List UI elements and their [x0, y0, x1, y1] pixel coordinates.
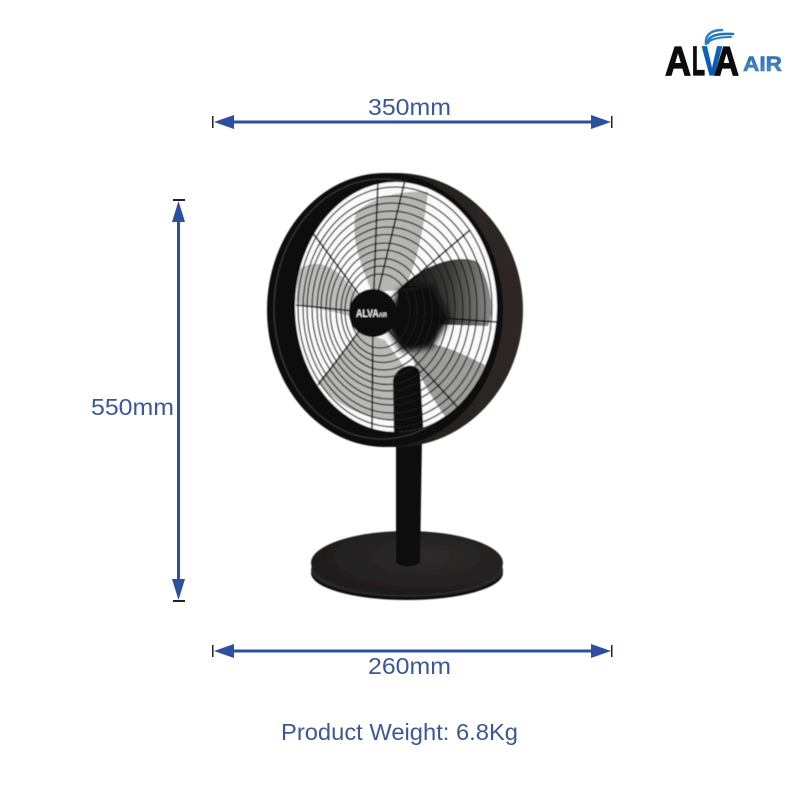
neck: [393, 366, 424, 440]
grille rings: [298, 187, 492, 427]
arrow: left height: [172, 199, 185, 602]
blades: [296, 180, 497, 440]
logo wordmark: [665, 38, 782, 84]
logo wordmark: V: [702, 38, 722, 84]
logo wordmark: A: [665, 38, 691, 84]
blade: left: [296, 264, 358, 316]
arrow: top width: [212, 115, 612, 129]
blade: right dark: [398, 259, 491, 326]
icon: logo swoosh: [706, 30, 733, 44]
fan pole: [396, 438, 422, 566]
arrow: bottom width: [212, 644, 612, 658]
ring highlight: [274, 179, 490, 439]
dimension: height 550mm: [91, 199, 185, 602]
logo wordmark: AIR: [743, 53, 782, 76]
blade: lower right: [408, 343, 485, 418]
fan product image: [267, 173, 523, 600]
motor shadow: [385, 284, 450, 352]
logo: Alva Air: [665, 30, 782, 84]
blade: top: [354, 192, 428, 292]
grille spokes: [296, 180, 497, 432]
logo wordmark: L: [692, 38, 705, 84]
blade: bottom: [318, 332, 408, 420]
label: 260mm: 260mm: [368, 653, 451, 679]
label: 350mm: 350mm: [368, 94, 451, 120]
opening: [295, 182, 497, 432]
fan head: [267, 173, 523, 447]
product weight: Product Weight: 6.8Kg: [281, 719, 518, 745]
dimension: width 350mm: [212, 94, 612, 129]
hub logo: ALVAAIR: [356, 308, 388, 320]
hub: [349, 289, 397, 337]
label: 550mm: 550mm: [91, 394, 174, 420]
fan base: [311, 531, 503, 600]
front ring: [267, 173, 503, 447]
outer rim: [269, 173, 523, 447]
logo wordmark: A: [714, 38, 739, 84]
dimension: base 260mm: [212, 644, 612, 679]
